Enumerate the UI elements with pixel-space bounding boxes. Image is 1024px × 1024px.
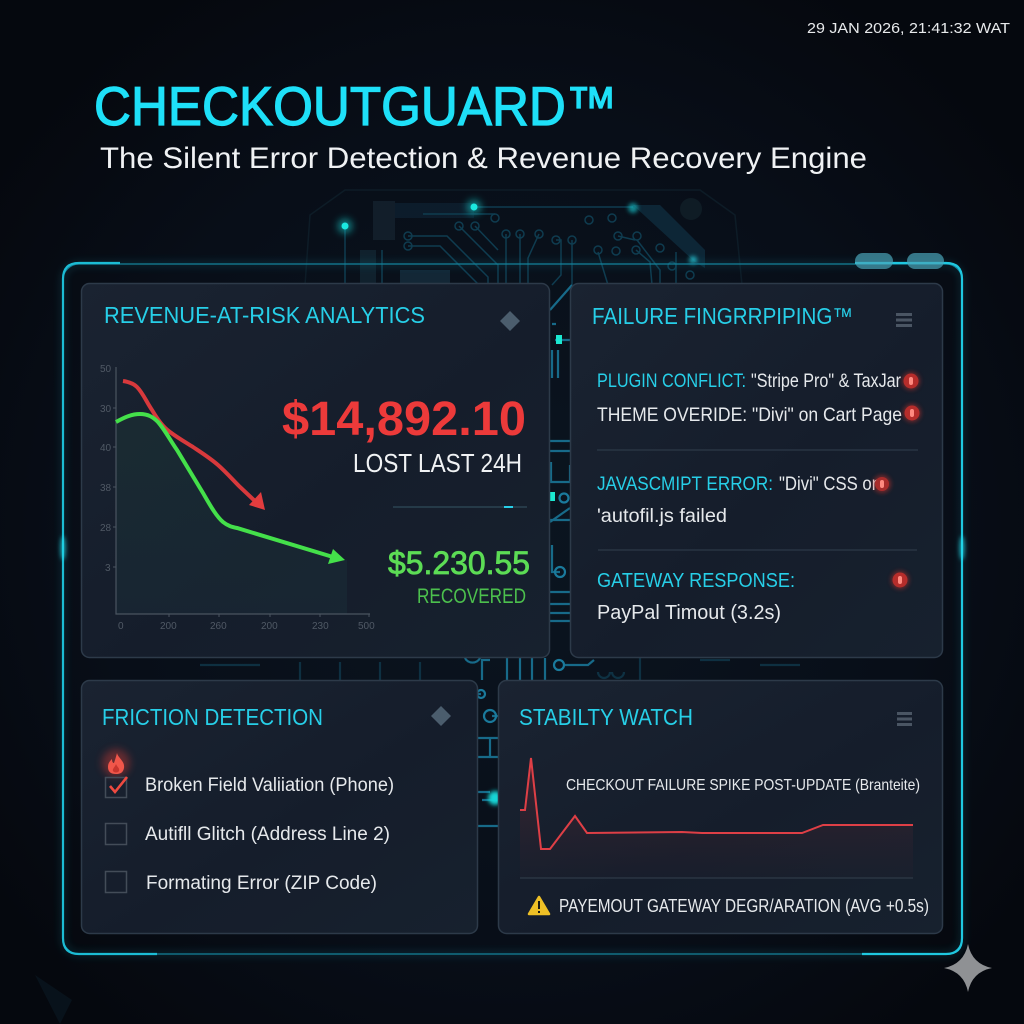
- heading: revenue-at-risk: REVENUE-AT-RISK ANALYTICS: [104, 302, 425, 328]
- gateway response row: GATEWAY RESPONSE:: [597, 570, 795, 592]
- stat label: recovered: RECOVERED: [417, 585, 526, 608]
- heading: failure fingerprinting: FAILURE FINGRRPIPING™: [592, 303, 853, 329]
- line chart: 30: [100, 404, 112, 415]
- line chart: 40: [100, 443, 112, 454]
- line chart: 28: [100, 523, 112, 534]
- icon: menu: [896, 314, 912, 326]
- line chart: 260: [210, 621, 227, 632]
- stat: lost amount: $14,892.10: [282, 393, 526, 446]
- chart annotation: CHECKOUT FAILURE SPIKE POST-UPDATE (Branteite): [566, 777, 920, 794]
- subtitle: The Silent Error Detection & Revenue Recovery Engine: [100, 142, 867, 175]
- gateway degradation note: PAYEMOUT GATEWAY DEGR/ARATION (AVG +0.5s): [559, 896, 929, 916]
- line chart: 38: [100, 483, 112, 494]
- panel: friction detection: [82, 680, 478, 934]
- javascript error row: [597, 473, 891, 527]
- stat: recovered amount: $5.230.55: [388, 545, 530, 581]
- theme override row: THEME OVERIDE: "Divi" on Cart Page: [597, 404, 902, 426]
- item: broken field validation: Broken Field Valiiation (Phone): [145, 775, 394, 796]
- line chart: [100, 364, 375, 632]
- line chart: 500: [358, 621, 375, 632]
- javascript error row: JAVASCMIPT ERROR:: [597, 473, 773, 495]
- area chart: failure spike: [520, 758, 913, 878]
- icon: flame: [102, 749, 130, 777]
- line chart: 200: [261, 621, 278, 632]
- panel: stability watch: [498, 680, 942, 934]
- panel: revenue-at-risk analytics: [82, 284, 550, 658]
- icon: sparkle: [944, 944, 992, 992]
- gateway response row: [597, 570, 909, 624]
- line chart: 230: [312, 621, 329, 632]
- title: CHECKOUTGUARD™: [94, 75, 617, 137]
- timestamp: 29 JAN 2026, 21:41:32 WAT: [807, 21, 1010, 37]
- gateway response row: PayPal Timout (3.2s): [597, 602, 781, 624]
- heading: stability watch: STABILTY WATCH: [519, 704, 693, 730]
- stat label: lost last 24h: LOST LAST 24H: [353, 448, 522, 478]
- item: formatting error: Formating Error (ZIP Code): [146, 873, 377, 894]
- icon: warning: [529, 897, 549, 914]
- outer glowing frame: [60, 253, 964, 954]
- plugin conflict row: PLUGIN CONFLICT:: [597, 371, 746, 392]
- plugin conflict row: [597, 371, 920, 392]
- icon: diamond: [431, 706, 451, 726]
- icon: diamond: [500, 311, 520, 331]
- icon: menu: [897, 714, 912, 724]
- heading: friction detection: FRICTION DETECTION: [102, 704, 323, 730]
- javascript error row: "Divi" CSS on: [779, 473, 881, 495]
- item: autofill glitch: Autifll Glitch (Address Line 2): [145, 824, 390, 845]
- javascript error row: 'autofil.js failed: [597, 505, 727, 527]
- plugin conflict row: "Stripe Pro" & TaxJar: [751, 371, 902, 392]
- line chart: 200: [160, 621, 177, 632]
- line chart: 0: [118, 621, 124, 632]
- circuit board background: [35, 190, 800, 1024]
- line chart: 50: [100, 364, 112, 375]
- panel: failure fingerprinting: [570, 284, 942, 658]
- line chart: 3: [105, 563, 111, 574]
